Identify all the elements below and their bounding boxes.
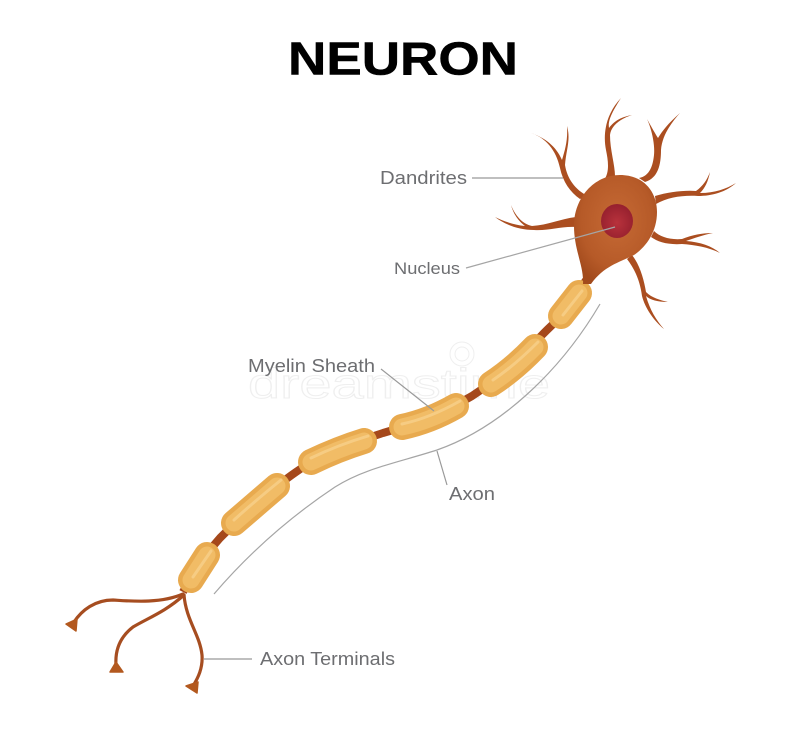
myelin segment 2 bbox=[491, 342, 538, 384]
nucleus bbox=[601, 204, 633, 238]
myelin segment 3 bbox=[402, 401, 460, 427]
myelin sheath segments bbox=[191, 291, 582, 580]
label: Nucleus: Nucleus bbox=[394, 259, 460, 278]
dendrites bbox=[495, 98, 736, 329]
label: Axon Terminals: Axon Terminals bbox=[260, 649, 395, 669]
label: Myelin Sheath bbox=[248, 356, 434, 411]
label: Nucleus bbox=[394, 227, 615, 278]
myelin segment 6 bbox=[191, 551, 211, 580]
terminal bulbs bbox=[66, 619, 198, 693]
label: Axon: Axon bbox=[449, 484, 495, 504]
label: Dandrites: Dandrites bbox=[380, 168, 467, 188]
axon bbox=[183, 280, 586, 592]
watermark: dreamstime bbox=[248, 360, 550, 407]
watermark bbox=[248, 342, 550, 407]
myelin segment 5 bbox=[234, 480, 281, 523]
title: NEURON bbox=[288, 32, 518, 84]
label: Axon bbox=[214, 304, 600, 594]
axon terminals bbox=[66, 594, 202, 693]
myelin segment 1 bbox=[561, 291, 582, 316]
label: Myelin Sheath: Myelin Sheath bbox=[248, 356, 375, 376]
myelin segment 4 bbox=[311, 436, 368, 462]
cell body bbox=[574, 175, 657, 284]
